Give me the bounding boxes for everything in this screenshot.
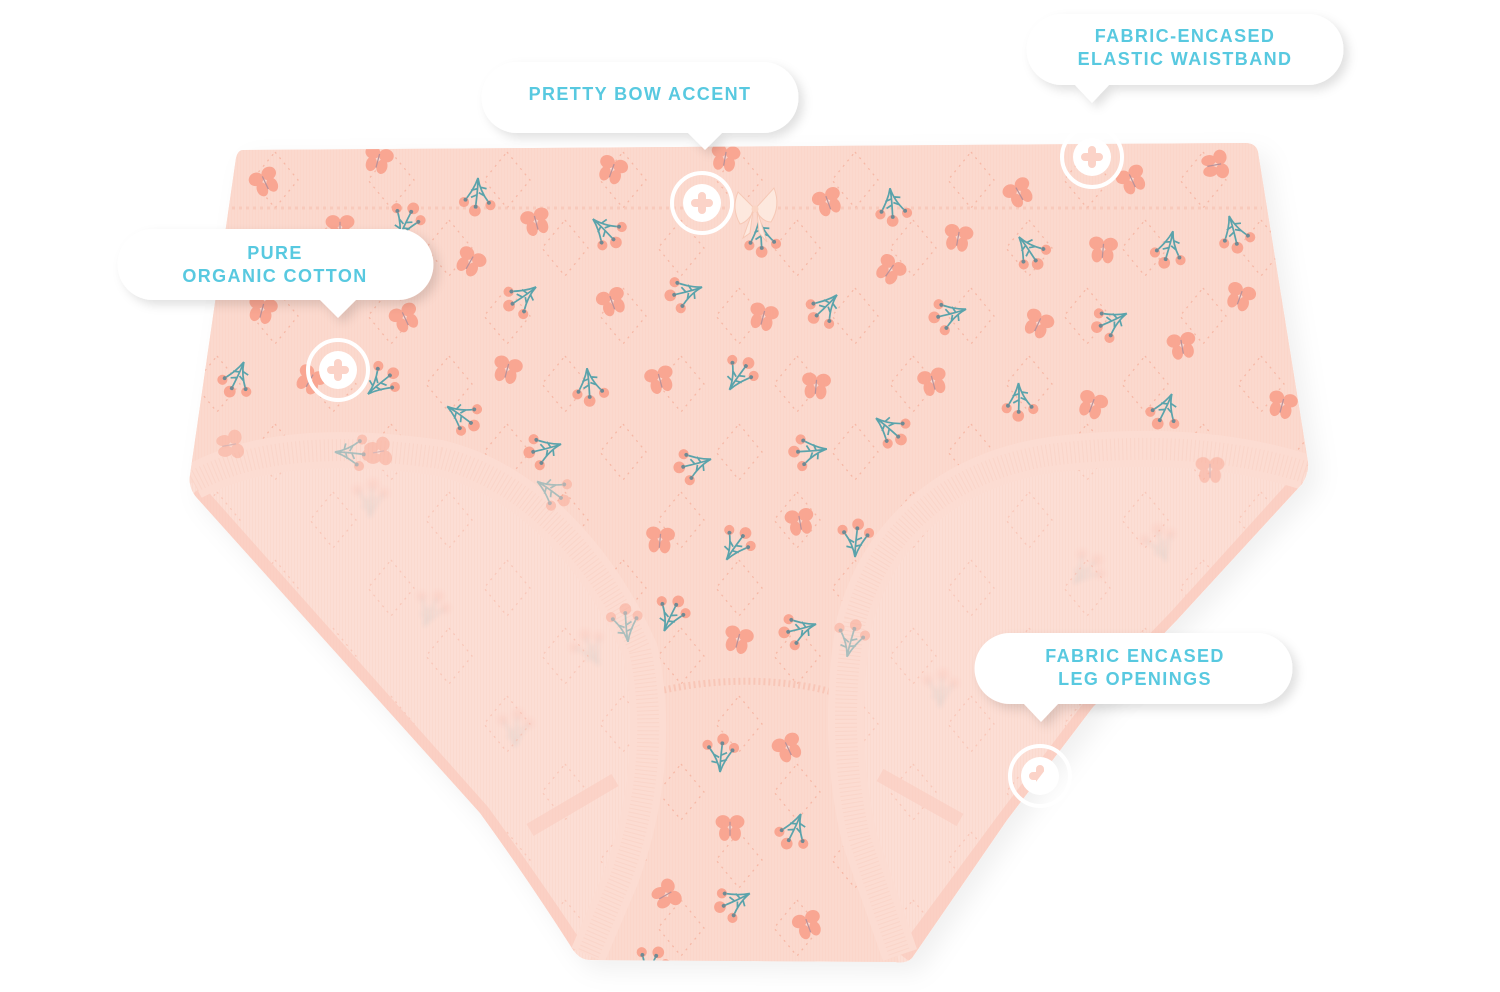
left leg band <box>193 450 648 955</box>
hotspot: leg openings <box>1010 746 1070 806</box>
flower prints <box>213 178 1259 989</box>
right leg band <box>846 449 1305 955</box>
infographic canvas <box>122 18 1351 970</box>
callout: pretty bow accent <box>482 62 798 150</box>
gusset seams <box>530 775 960 830</box>
callout: fabric encased leg openings <box>974 633 1292 722</box>
waistband seam <box>232 206 1262 210</box>
callout: pure organic cotton: ORGANIC COTTON <box>182 266 368 286</box>
callout: fabric encased leg openings: LEG OPENINGS <box>1058 669 1212 689</box>
garment: pink floral underwear <box>180 140 1320 989</box>
prints bleeding through bands <box>215 429 1224 660</box>
callout: fabric-encased elastic waistband: FABRIC-ENCASED <box>1095 26 1275 46</box>
left leg band ribs <box>193 450 648 955</box>
callout: pure organic cotton: PURE <box>247 243 303 263</box>
knit texture <box>180 140 1320 970</box>
callout: pure organic cotton <box>118 229 433 318</box>
callout: fabric-encased elastic waistband <box>1026 14 1344 103</box>
lining pointelle diamonds <box>214 468 1267 918</box>
hotspot: organic cotton <box>308 340 368 400</box>
garment silhouette lining <box>190 143 1308 962</box>
butterfly prints <box>245 143 1299 942</box>
faded print showing through lining <box>352 479 1184 747</box>
hotspot: waistband <box>1062 127 1122 187</box>
callout: fabric-encased elastic waistband: ELASTIC WAISTBAND <box>1078 49 1292 69</box>
callout: fabric encased leg openings: FABRIC ENCASED <box>1045 646 1225 666</box>
pointelle diamonds <box>180 140 1320 965</box>
clipped fabric layers <box>180 140 1320 989</box>
callout: pretty bow accent: PRETTY BOW ACCENT <box>529 84 751 104</box>
bow accent <box>735 188 777 242</box>
leg seam stitching edge <box>195 482 1302 958</box>
hotspot: bow accent <box>672 173 732 233</box>
gusset seam <box>664 681 832 692</box>
right leg band ribs <box>846 449 1305 955</box>
front body panel <box>180 140 1320 965</box>
